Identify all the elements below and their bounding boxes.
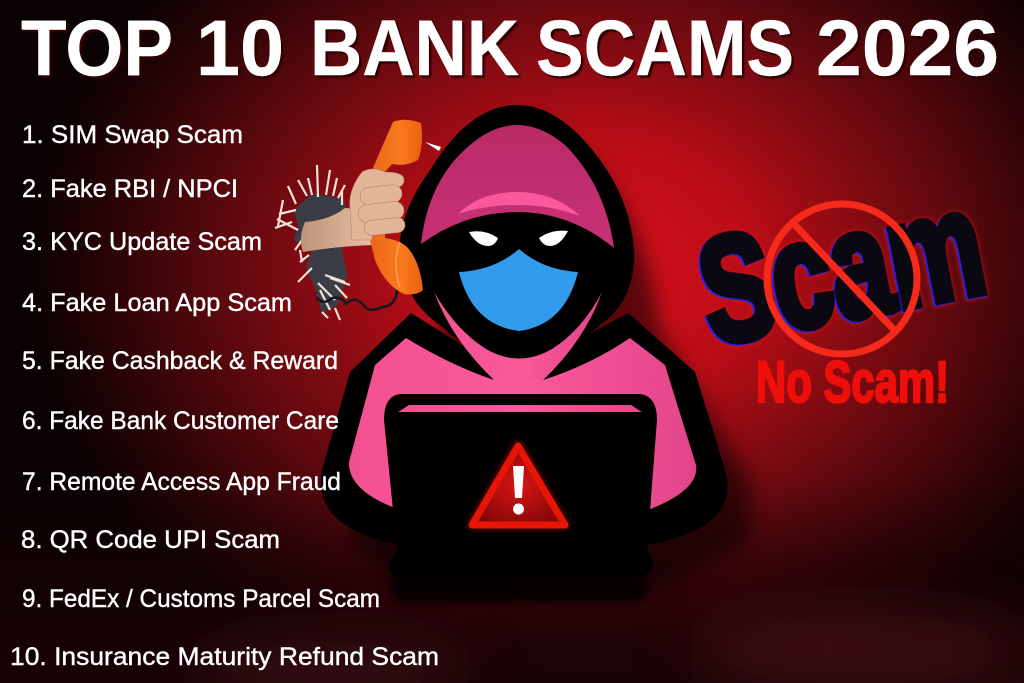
handset highlight (396, 242, 400, 288)
item 8: 8. QR Code UPI Scam (21, 526, 280, 554)
laptop (384, 394, 657, 578)
hood outline (400, 105, 634, 360)
prohibition sign (767, 204, 917, 354)
laptop base fade (392, 574, 648, 602)
background: bottom smoke (0, 480, 1024, 683)
title: BANK (310, 3, 519, 92)
eye left (469, 231, 498, 246)
warning icon (472, 445, 565, 525)
item 4: 4. Fake Loan App Scam (22, 289, 292, 317)
item 6: 6. Fake Bank Customer Care (22, 407, 339, 435)
torn hole with hand holding phone (275, 120, 423, 320)
item 2: 2. Fake RBI / NPCI (22, 175, 238, 203)
no scam text: No Scam! (756, 350, 949, 415)
handset (368, 120, 423, 295)
item 5: 5. Fake Cashback & Reward (22, 347, 338, 375)
item 7: 7. Remote Access App Fraud (22, 468, 341, 496)
hand fingers (350, 169, 406, 240)
eye right (539, 231, 568, 246)
phone cord (316, 290, 397, 310)
item 3: 3. KYC Update Scam (22, 228, 262, 256)
title: 2026 (816, 3, 999, 92)
forearm (301, 208, 372, 252)
spark (425, 142, 441, 151)
mask (459, 249, 578, 331)
title: TOP (21, 3, 173, 92)
no-scam badge (686, 157, 997, 415)
laptop rim (398, 405, 642, 412)
body outline (321, 313, 728, 545)
hood inside (421, 125, 614, 248)
scam list (10, 121, 439, 671)
hacker figure (321, 105, 750, 602)
item 10: 10. Insurance Maturity Refund Scam (10, 643, 439, 671)
figure shadow (350, 120, 750, 590)
title: 10 (196, 3, 284, 92)
hood highlight (458, 192, 580, 216)
torn hole (275, 165, 350, 320)
item 1: 1. SIM Swap Scam (22, 121, 243, 149)
title (21, 3, 999, 92)
title: SCAMS (536, 3, 794, 92)
collar pink (434, 292, 602, 380)
item 9: 9. FedEx / Customs Parcel Scam (22, 585, 380, 613)
pink torso (349, 292, 696, 510)
